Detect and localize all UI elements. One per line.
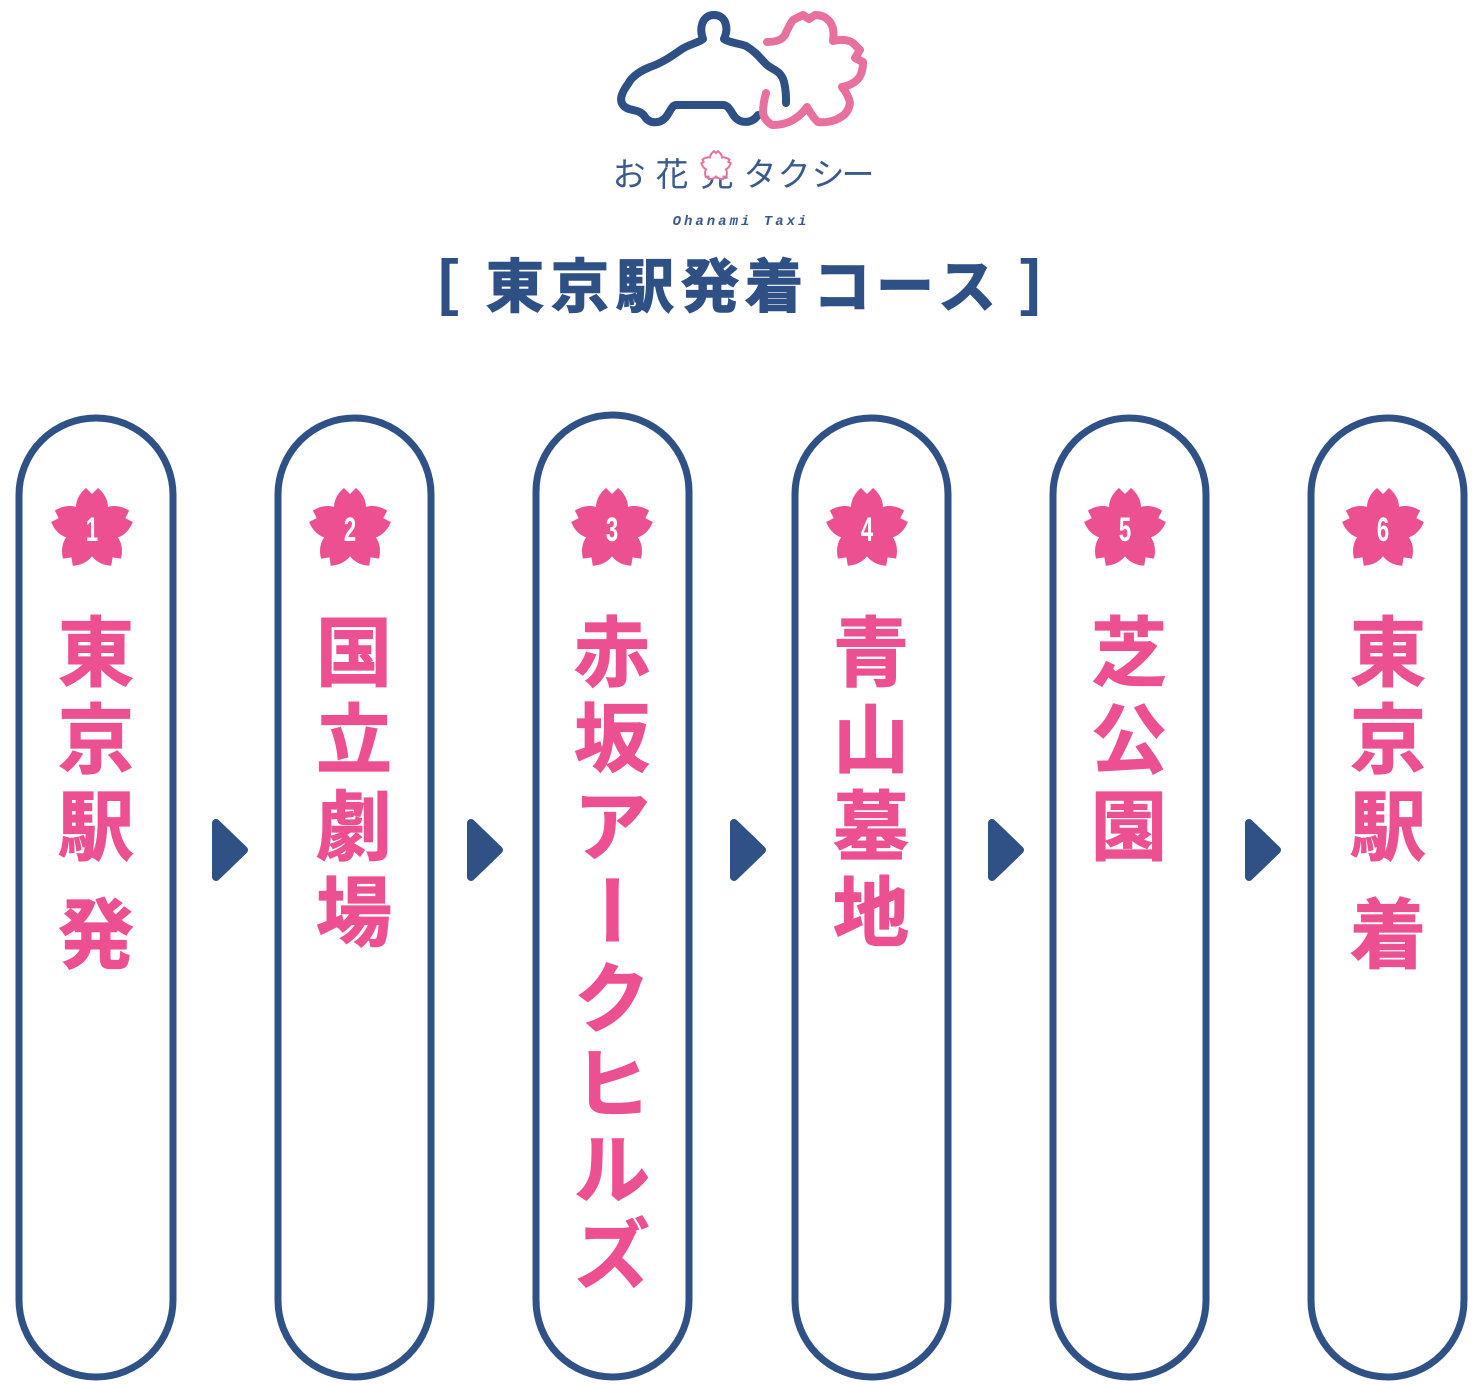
title: 着 xyxy=(745,255,803,320)
stop name: 公 xyxy=(1091,699,1167,784)
icon: blossom 5 xyxy=(1081,488,1169,572)
icon: blossom 5: 5 xyxy=(1119,511,1131,549)
arrow xyxy=(1249,823,1277,877)
title xyxy=(438,248,1041,320)
title: 発 xyxy=(681,255,739,320)
icon: taxi outline xyxy=(621,15,786,122)
logo wordmark xyxy=(612,156,874,193)
logo wordmark: お xyxy=(612,156,646,193)
stop name: 地 xyxy=(833,872,909,957)
title: ー xyxy=(876,255,934,320)
stop name: 東 xyxy=(1350,612,1426,697)
logo wordmark: シ xyxy=(812,156,844,193)
title: ス xyxy=(938,255,996,320)
stop name: 坂 xyxy=(574,698,650,783)
icon: blossom 4 xyxy=(823,488,911,572)
stop name: 山 xyxy=(833,699,909,784)
stop name: 京 xyxy=(1350,699,1426,784)
stop name: 駅 xyxy=(1350,786,1426,871)
stop name: ー xyxy=(566,872,651,948)
icon: blossom 6 xyxy=(1339,488,1427,572)
stop name: 駅 xyxy=(58,786,134,871)
stop name xyxy=(1091,612,1167,871)
icon: blossom outline xyxy=(763,15,863,125)
icon: blossom 1 xyxy=(48,488,136,572)
logo subtitle: Ohanami Taxi xyxy=(673,214,809,230)
arrow xyxy=(471,823,499,877)
icon: blossom 4: 4 xyxy=(861,511,873,549)
stop name xyxy=(1350,612,1426,979)
icon: blossom 3: 3 xyxy=(606,511,618,549)
stop name xyxy=(58,612,134,979)
stop name: 青 xyxy=(833,612,909,697)
stop name: 着 xyxy=(1350,894,1426,979)
arrow xyxy=(992,823,1020,877)
icon: blossom 1: 1 xyxy=(86,511,98,549)
panel: stop 4 青山墓地 xyxy=(795,418,948,1377)
icon: blossom 2: 2 xyxy=(344,511,356,549)
panel: stop 3 赤坂アークヒルズ xyxy=(536,415,689,1377)
stop name: 墓 xyxy=(833,786,909,871)
panel: stop 1 東京駅発 xyxy=(19,418,173,1377)
stop name: ア xyxy=(574,786,650,871)
stop name: ク xyxy=(574,958,650,1043)
icon: blossom 3 xyxy=(568,488,656,572)
title: 東 xyxy=(486,255,544,320)
logo wordmark: ク xyxy=(778,156,810,193)
panel: stop 2 国立劇場 xyxy=(278,418,431,1377)
icon: small blossom in wordmark xyxy=(702,152,730,180)
logo wordmark: ー xyxy=(842,156,874,193)
stop name: 芝 xyxy=(1091,612,1167,697)
stop name: 発 xyxy=(58,894,134,979)
logo: taxi and cherry blossom xyxy=(612,15,874,230)
icon: blossom 2 xyxy=(306,488,394,572)
logo wordmark: 見 xyxy=(700,156,734,193)
title: コ xyxy=(813,255,871,320)
arrow xyxy=(734,823,762,877)
panel: stop 6 東京駅着 xyxy=(1311,418,1464,1377)
stop name xyxy=(566,612,651,1299)
stop name: 劇 xyxy=(316,786,392,871)
stop name: 場 xyxy=(316,872,392,957)
panel: stop 5 芝公園 xyxy=(1053,418,1206,1377)
stop name xyxy=(833,612,909,957)
stop name: ズ xyxy=(574,1214,650,1299)
title: [ xyxy=(438,248,459,317)
logo wordmark: 花 xyxy=(656,156,688,193)
title: ] xyxy=(1020,248,1041,317)
title: 駅 xyxy=(616,255,674,320)
icon: blossom 6: 6 xyxy=(1377,511,1389,549)
stop name: ヒ xyxy=(574,1044,650,1129)
stop name: 京 xyxy=(58,699,134,784)
stop name: 国 xyxy=(316,612,392,697)
stop name: 東 xyxy=(58,612,134,697)
stop name xyxy=(316,612,392,957)
stop name: 立 xyxy=(316,699,392,784)
stop name: 赤 xyxy=(574,612,650,697)
arrow xyxy=(216,823,244,877)
logo wordmark: タ xyxy=(744,156,776,193)
title: 京 xyxy=(551,255,609,320)
stop name: 園 xyxy=(1091,786,1167,871)
stop name: ル xyxy=(574,1129,650,1214)
